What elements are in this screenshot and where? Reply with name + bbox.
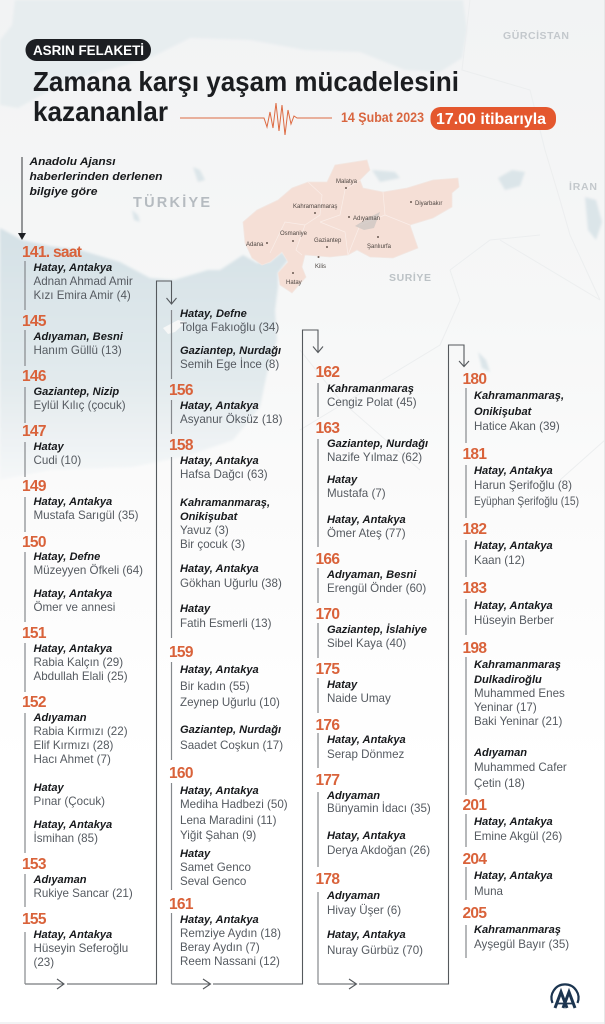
hour 181: Harun Şerifoğlu (8): [474, 479, 572, 492]
hour 170: [316, 606, 427, 658]
hour 156: 156: [169, 382, 194, 399]
hour 198: Dulkadiroğlu: [474, 674, 542, 686]
hour 176: Hatay, Antakya: [327, 734, 406, 746]
source note: bilgiye göre: [30, 186, 98, 198]
country label: İran: İRAN: [569, 180, 597, 193]
hour 152: Elif Kırmızı (28): [34, 739, 114, 752]
hour 151: Rabia Kalçın (29): [34, 656, 123, 669]
hour 150: Müzeyyen Öfkeli (64): [34, 564, 143, 577]
hour 175: Hatay: [327, 679, 358, 691]
title: kazananlar: [33, 96, 168, 127]
hour 152: Rabia Kırmızı (22): [34, 725, 128, 738]
map: earthquake region provinces: [243, 160, 459, 293]
hour 163: Gaziantep, Nurdağı: [327, 438, 428, 450]
timeline column 3: [316, 364, 431, 984]
hour 180: Hatice Akan (39): [474, 420, 560, 433]
hour 182: Hatay, Antakya: [474, 540, 553, 552]
hour 155: 155: [22, 911, 47, 928]
timeline column 1: [22, 244, 143, 984]
hour 178: Adıyaman: [326, 890, 380, 902]
hour 201: 201: [462, 797, 487, 814]
hour 166: [316, 551, 426, 603]
header badge: ASRIN FELAKETİ: [33, 43, 144, 58]
hour 205: Kahramanmaraş: [474, 924, 561, 936]
hour 141: Kızı Emira Amir (4): [34, 289, 131, 302]
title: [33, 66, 459, 127]
hour 170: Gaziantep, İslahiye: [327, 623, 427, 636]
hour 177: 177: [316, 772, 339, 789]
hour 156: [169, 382, 283, 434]
hour 160: Hatay, Antakya: [180, 785, 259, 797]
hour 152: [22, 694, 128, 853]
hour 158: [169, 437, 282, 638]
hour 155: Hüseyin Seferoğlu: [34, 942, 128, 955]
map: earthquake region provinces: Gaziantep: [314, 238, 342, 244]
hour 152: 152: [22, 694, 46, 711]
hour 178: Nuray Gürbüz (70): [327, 944, 423, 957]
hour 198: Yeninar (17): [474, 701, 537, 714]
hour 159: Hatay, Antakya: [180, 664, 259, 676]
hour 162: Kahramanmaraş: [327, 383, 414, 395]
hour 159: Gaziantep, Nurdağı: [180, 724, 281, 736]
hour 145: Hanım Güllü (13): [34, 344, 122, 357]
hour 160: Seval Genco: [180, 875, 246, 888]
hour 156: Asyanur Öksüz (18): [180, 413, 283, 426]
hour 159: Saadet Coşkun (17): [180, 739, 283, 752]
hour 180: Onikişubat: [474, 406, 533, 418]
hour 158: Hatay: [180, 603, 211, 615]
map: earthquake region provinces: Malatya: [336, 179, 358, 185]
hour 155: [22, 911, 128, 984]
hour 178: Hivay Üşer (6): [327, 904, 401, 917]
hour 180: [462, 371, 564, 443]
hour 178: Hatay, Antakya: [327, 929, 406, 941]
hour 183: 183: [462, 580, 487, 597]
hour 176: [316, 717, 406, 768]
hour 204: [462, 851, 553, 900]
source note: Anadolu Ajansı: [28, 156, 116, 168]
hour 141: [22, 244, 133, 310]
hour 160: [169, 765, 288, 890]
hour 205: [462, 905, 569, 958]
map: earthquake region provinces: Kilis: [315, 264, 326, 270]
hour 149: 149: [22, 478, 47, 495]
hour 160: 160: [169, 765, 193, 782]
hour 201: Emine Akgül (26): [474, 830, 562, 843]
hour 166: Adıyaman, Besni: [326, 569, 417, 581]
hour 178: [316, 871, 423, 984]
hour 149: [22, 478, 139, 532]
hour 161: Remziye Aydın (18): [180, 927, 281, 940]
hour 162: Cengiz Polat (45): [327, 396, 417, 409]
map: earthquake region provinces: Hatay: [286, 280, 302, 286]
icon: Anadolu Agency logo: [552, 984, 578, 1008]
hour 151: [22, 625, 128, 692]
hour 155: Hatay, Antakya: [34, 929, 112, 941]
time badge: [430, 107, 556, 130]
hour 161: Beray Aydın (7): [180, 941, 260, 954]
flow connector: column 3 to column 4: [318, 345, 469, 989]
seismograph line: [180, 103, 332, 135]
hour 153: Rukiye Sancar (21): [34, 887, 133, 900]
hour 150: [22, 534, 143, 622]
hour 141: Hatay, Antakya: [34, 262, 112, 274]
hour 160: Hatay: [180, 848, 211, 860]
hour 152: Hacı Ahmet (7): [34, 753, 111, 766]
country label: Türkiye: TÜRKİYE: [133, 194, 210, 211]
hour 150: Hatay, Antakya: [34, 588, 112, 600]
hour 163: Hatay, Antakya: [327, 514, 406, 526]
source note: [28, 156, 163, 198]
hour 175: 175: [316, 661, 340, 678]
hour 153: 153: [22, 856, 47, 873]
hour 158: 158: [169, 437, 194, 454]
hour 145: Adıyaman, Besni: [32, 331, 124, 343]
hour 163: 163: [316, 420, 340, 437]
hour 150: 150: [22, 534, 46, 551]
hour 183: [462, 580, 554, 635]
map: earthquake region provinces: Adana: [246, 242, 264, 248]
hour 177: [316, 772, 431, 867]
hour 155: (23): [34, 956, 54, 969]
hour 161: Reem Nassani (12): [180, 955, 280, 968]
hour 146: Eylül Kılıç (çocuk): [34, 399, 126, 412]
hour 161: 161: [169, 896, 194, 913]
hour 158: Fatih Esmerli (13): [180, 617, 272, 630]
hour 158: Hatay, Antakya: [180, 563, 259, 575]
hour 204: 204: [462, 851, 487, 868]
date: 14 Şubat 2023: [341, 110, 424, 125]
hour 152: Pınar (Çocuk): [34, 795, 105, 808]
hour 177: Hatay, Antakya: [327, 830, 406, 842]
hour 149: Mustafa Sarıgül (35): [34, 509, 139, 522]
hour 183: Hatay, Antakya: [474, 600, 553, 612]
hour 205: Ayşegül Bayır (35): [474, 938, 569, 951]
hour 158: Kahramanmaraş,: [180, 497, 270, 509]
hour 180: Kahramanmaraş,: [474, 390, 564, 402]
hour 141: 141. saat: [22, 244, 82, 261]
hour 147: 147: [22, 423, 46, 440]
hour 146: Gaziantep, Nizip: [34, 386, 119, 398]
timeline column 4: [462, 371, 579, 958]
hour 166: 166: [316, 551, 340, 568]
hour 180: 180: [462, 371, 486, 388]
hour 163: Ömer Ateş (77): [327, 527, 406, 540]
hour 177: Bünyamin İdacı (35): [327, 802, 431, 815]
hour 159: [169, 644, 283, 760]
hour 155 continued: Semih Ege İnce (8): [180, 358, 279, 371]
hour 146: 146: [22, 368, 47, 385]
hour 141: Adnan Ahmad Amir: [34, 275, 133, 288]
hour 159: 159: [169, 644, 194, 661]
hour 181: Eyüphan Şerifoğlu (15): [474, 495, 579, 508]
header badge: [26, 39, 151, 61]
hour 162: [316, 364, 417, 417]
hour 160: Mediha Hadbezi (50): [180, 798, 288, 811]
hour 155 continued: Hatay, Defne: [180, 308, 247, 320]
hour 198: Muhammed Enes: [474, 687, 565, 700]
hour 155 continued: [172, 308, 281, 379]
hour 204: Muna: [474, 885, 504, 898]
hour 175: Naide Umay: [327, 692, 391, 705]
hour 159: Zeynep Uğurlu (10): [180, 696, 280, 709]
map: earthquake region provinces: Diyarbakır: [415, 201, 442, 207]
hour 147: Cudi (10): [34, 454, 81, 467]
hour 181: Hatay, Antakya: [474, 465, 553, 477]
hour 152: Adıyaman: [32, 712, 87, 724]
hour 181: 181: [462, 446, 487, 463]
hour 198: Baki Yeninar (21): [474, 715, 562, 728]
hour 158: Onikişubat: [180, 511, 239, 523]
hour 151: Hatay, Antakya: [34, 643, 112, 655]
hour 153: Adıyaman: [32, 874, 87, 886]
hour 149: Hatay, Antakya: [34, 496, 112, 508]
hour 150: Ömer ve annesi: [34, 601, 115, 614]
hour 163: [316, 420, 428, 547]
hour 176: 176: [316, 717, 340, 734]
hour 163: Nazife Yılmaz (62): [327, 451, 422, 464]
hour 160: Yiğit Şahan (9): [180, 829, 256, 842]
hour 198: [462, 640, 567, 795]
hour 183: Hüseyin Berber: [474, 614, 554, 627]
map: earthquake region provinces: Adıyaman: [353, 216, 380, 222]
title: Zamana karşı yaşam mücadelesini: [33, 66, 459, 97]
time badge: 17.00 itibarıyla: [436, 111, 546, 128]
hour 198: Adıyaman: [473, 747, 527, 759]
source note: haberlerinden derlenen: [30, 171, 163, 183]
hour 147: Hatay: [34, 441, 65, 453]
hour 201: [462, 797, 562, 847]
hour 170: 170: [316, 606, 339, 623]
hour 198: Çetin (18): [474, 777, 525, 790]
hour 158: Yavuz (3): [180, 524, 229, 537]
hour 145: [22, 313, 124, 366]
map: earthquake region provinces: Osmaniye: [280, 231, 308, 237]
country label: Suriye: SURİYE: [389, 271, 431, 284]
hour 160: Lena Maradini (11): [180, 814, 277, 827]
hour 182: Kaan (12): [474, 554, 525, 567]
hour 151: 151: [22, 625, 47, 642]
hour 152: Hatay, Antakya: [34, 819, 112, 831]
hour 161: Hatay, Antakya: [180, 914, 259, 926]
hour 198: 198: [462, 640, 487, 657]
hour 181: [462, 446, 579, 518]
hour 158: Bir çocuk (3): [180, 538, 245, 551]
flow connector: column 2 to column 3: [172, 330, 323, 989]
hour 156: Hatay, Antakya: [180, 400, 259, 412]
hour 204: Hatay, Antakya: [474, 870, 553, 882]
hour 177: Adıyaman: [326, 790, 380, 802]
hour 145: 145: [22, 313, 47, 330]
hour 159: Bir kadın (55): [180, 680, 250, 693]
hour 155 continued: Gaziantep, Nurdağı: [180, 345, 281, 357]
hour 166: Erengül Önder (60): [327, 582, 426, 595]
hour 147: [22, 423, 81, 477]
hour 152: Hatay: [34, 782, 65, 794]
hour 176: Serap Dönmez: [327, 748, 405, 761]
hour 158: Hafsa Dağcı (63): [180, 468, 268, 481]
hour 198: Kahramanmaraş: [474, 659, 561, 671]
hour 178: 178: [316, 871, 340, 888]
hour 163: Mustafa (7): [327, 487, 386, 500]
hour 153: [22, 856, 133, 907]
hour 158: Hatay, Antakya: [180, 455, 259, 467]
hour 152: İsmihan (85): [34, 832, 98, 845]
country label: Gürcistan: GÜRCİSTAN: [503, 29, 569, 42]
hour 175: [316, 661, 391, 713]
hour 182: [462, 521, 553, 577]
hour 198: Muhammed Cafer: [474, 761, 567, 774]
flow connector: column 1 to column 2: [25, 281, 176, 989]
hour 150: Hatay, Defne: [34, 551, 100, 563]
map: earthquake region provinces: Şanlıurfa: [367, 244, 392, 250]
arrow: source down to timeline: [18, 157, 26, 240]
hour 205: 205: [462, 905, 487, 922]
hour 177: Derya Akdoğan (26): [327, 844, 430, 857]
hour 182: 182: [462, 521, 486, 538]
hour 201: Hatay, Antakya: [474, 816, 553, 828]
hour 155 continued: Tolga Fakıoğlu (34): [180, 321, 279, 334]
hour 151: Abdullah Elali (25): [34, 670, 128, 683]
hour 161: [169, 896, 281, 984]
map: earthquake region provinces: Kahramanmaraş: [293, 204, 337, 210]
hour 160: Samet Genco: [180, 861, 251, 874]
hour 163: Hatay: [327, 474, 358, 486]
hour 158: Gökhan Uğurlu (38): [180, 577, 282, 590]
timeline column 2: [169, 308, 288, 984]
hour 162: 162: [316, 364, 339, 381]
hour 146: [22, 368, 126, 423]
hour 170: Sibel Kaya (40): [327, 637, 406, 650]
